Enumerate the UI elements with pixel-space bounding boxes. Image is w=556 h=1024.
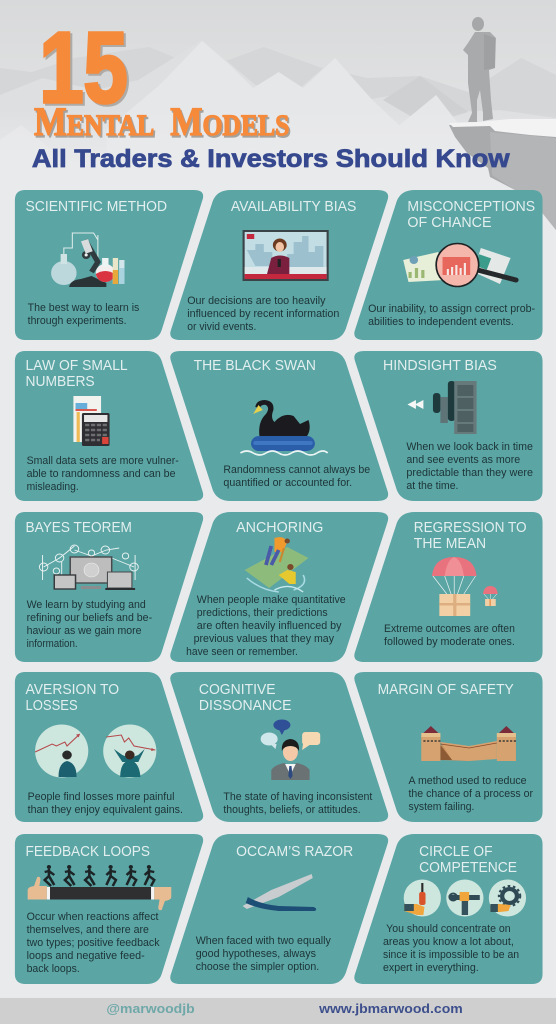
description (27, 599, 152, 650)
description: haviour as we gain more (27, 625, 141, 637)
description: People find losses more painful (28, 791, 174, 803)
heading (199, 681, 292, 714)
icon: magnified charts (403, 244, 516, 286)
heading (407, 198, 535, 231)
panel: anchoring (170, 512, 388, 662)
panel: availability bias (170, 190, 388, 340)
description (196, 935, 331, 973)
heading: OCCAM’S RAZOR (236, 843, 353, 860)
icon: black swan on float (240, 400, 328, 455)
description: or vivid events. (187, 321, 256, 333)
description: than they enjoy equivalent gains. (28, 804, 183, 816)
panel: bayes teorem (15, 512, 203, 662)
description: previous values that they may (194, 633, 334, 645)
heading: AVERSION TO (26, 681, 119, 698)
icon: man watching falling chart (103, 724, 156, 778)
title: Mental Models (34, 99, 291, 146)
icon: straight razor (243, 874, 316, 911)
heading: LAW OF SMALL (26, 357, 128, 374)
description: refining our beliefs and be- (27, 612, 152, 624)
description: quantified or accounted for. (223, 477, 352, 489)
description: information. (27, 638, 78, 650)
description: through experiments. (28, 315, 127, 327)
description: misleading. (27, 481, 79, 493)
panel: hindsight bias (354, 351, 543, 501)
footer (0, 998, 556, 1024)
description (406, 441, 533, 492)
description: The best way to learn is (28, 302, 140, 314)
icon: screwdriver in hand (404, 880, 441, 916)
description: When we look back in time (406, 441, 533, 453)
description (384, 623, 515, 648)
icon: fortress wall (421, 726, 516, 761)
heading: BAYES TEOREM (26, 519, 132, 536)
description: two types; positive feedback (27, 937, 160, 949)
description: and see events as more (406, 454, 520, 466)
description: predictions, their predictions (197, 607, 328, 619)
description: expert in everything. (383, 962, 479, 974)
description: good hypotheses, always (196, 948, 316, 960)
title: Mental Models: MODELS (172, 101, 291, 146)
heading: CIRCLE OF (419, 843, 493, 860)
description: system failing. (408, 801, 474, 813)
title: 15: 15 (41, 14, 130, 125)
description: abilities to independent events. (368, 316, 514, 328)
description: thoughts, beliefs, or attitudes. (223, 804, 361, 816)
icon: news broadcast screen (243, 230, 329, 281)
heading: COGNITIVE (199, 681, 276, 698)
description: You should concentrate on (386, 923, 511, 935)
icon: man watching rising chart (35, 724, 88, 778)
description: Small data sets are more vulner- (27, 455, 179, 467)
heading: MARGIN OF SAFETY (378, 681, 514, 698)
panel: regression to the mean (354, 512, 543, 662)
heading (419, 843, 517, 876)
heading: SCIENTIFIC METHOD (26, 198, 167, 215)
description: Occur when reactions affect (27, 911, 159, 923)
description: When people make quantitative (197, 594, 346, 606)
heading: MISCONCEPTIONS (407, 198, 535, 215)
heading: OF CHANCE (407, 214, 491, 231)
title: 15: 15 (39, 12, 128, 123)
description: since it is impossible to be an (383, 949, 519, 961)
icon: wrench and hammer (446, 880, 483, 916)
description (27, 911, 160, 975)
description: followed by moderate ones. (384, 636, 515, 648)
panel: the black swan (170, 351, 388, 501)
description (27, 455, 179, 493)
description: the chance of a process or (408, 788, 533, 800)
title: Mental Models: MODELS (170, 99, 289, 144)
description (408, 775, 533, 813)
panel: misconceptions of chance (354, 190, 543, 340)
panel: scientific method (15, 190, 203, 340)
description (383, 923, 519, 974)
heading: COMPETENCE (419, 859, 517, 876)
icon: gear in hand (489, 880, 526, 916)
description: predictable than they were (406, 467, 533, 479)
description (28, 302, 140, 327)
description: able to randomness and can be (27, 468, 176, 480)
cliff (449, 119, 556, 230)
description: have seen or remember. (186, 646, 298, 658)
title: Mental Models: MENTAL (36, 101, 156, 146)
icon: lab equipment (51, 233, 124, 287)
description: The state of having inconsistent (223, 791, 373, 803)
subtitle: All Traders & Investors Should Know (32, 146, 511, 173)
title: Mental Models: MENTAL (34, 99, 154, 144)
icon: parachutes with boxes (432, 557, 498, 616)
description (186, 594, 346, 658)
footer handle: @marwoodjb (106, 1001, 195, 1016)
description: are often heavily influenced by (197, 620, 342, 632)
panel: law of small numbers (15, 351, 203, 501)
heading: THE BLACK SWAN (194, 357, 316, 374)
panel: cognitive dissonance (170, 672, 388, 822)
description: When faced with two equally (196, 935, 331, 947)
icon: thinking businessman (261, 720, 320, 780)
heading: LOSSES (26, 697, 78, 714)
description (368, 303, 535, 328)
panel: occam's razor (170, 834, 388, 984)
heading: NUMBERS (26, 373, 95, 390)
heading (26, 681, 119, 714)
description (28, 791, 183, 816)
heading: REGRESSION TO (414, 519, 527, 536)
description: Extreme outcomes are often (384, 623, 515, 635)
heading: AVAILABILITY BIAS (231, 198, 356, 215)
description: choose the simpler option. (196, 961, 319, 973)
description: Randomness cannot always be (223, 464, 370, 476)
description: loops and negative feed- (27, 950, 145, 962)
panel: circle of competence (354, 834, 543, 984)
heading: HINDSIGHT BIAS (383, 357, 497, 374)
header mountains background (0, 40, 556, 195)
heading: THE MEAN (414, 535, 486, 552)
description: themselves, and there are (27, 924, 149, 936)
icon: calculator and paper (73, 396, 110, 446)
man silhouette (463, 17, 496, 122)
heading: FEEDBACK LOOPS (26, 843, 150, 860)
panel: feedback loops (15, 834, 203, 984)
description: at the time. (406, 480, 458, 492)
description (187, 295, 339, 333)
heading (26, 357, 128, 390)
description: Our inability, to assign correct prob- (368, 303, 535, 315)
heading (414, 519, 527, 552)
description (223, 791, 373, 816)
description: Our decisions are too heavily (187, 295, 326, 307)
heading: DISSONANCE (199, 697, 292, 714)
description: influenced by recent information (187, 308, 339, 320)
icon: person rescuing another from water (245, 537, 309, 592)
description: areas you know a lot about, (383, 936, 514, 948)
description: We learn by studying and (27, 599, 146, 611)
footer website: www.jbmarwood.com (318, 1001, 463, 1016)
heading: ANCHORING (236, 519, 323, 536)
description (223, 464, 370, 489)
icon: rewind film strip (407, 381, 477, 434)
description: A method used to reduce (408, 775, 527, 787)
icon: network over devices (39, 545, 138, 590)
panel: aversion to losses (15, 672, 203, 822)
panel: margin of safety (354, 672, 543, 822)
description: back loops. (27, 963, 80, 975)
icon: runners on arm with thumbs (28, 865, 171, 910)
